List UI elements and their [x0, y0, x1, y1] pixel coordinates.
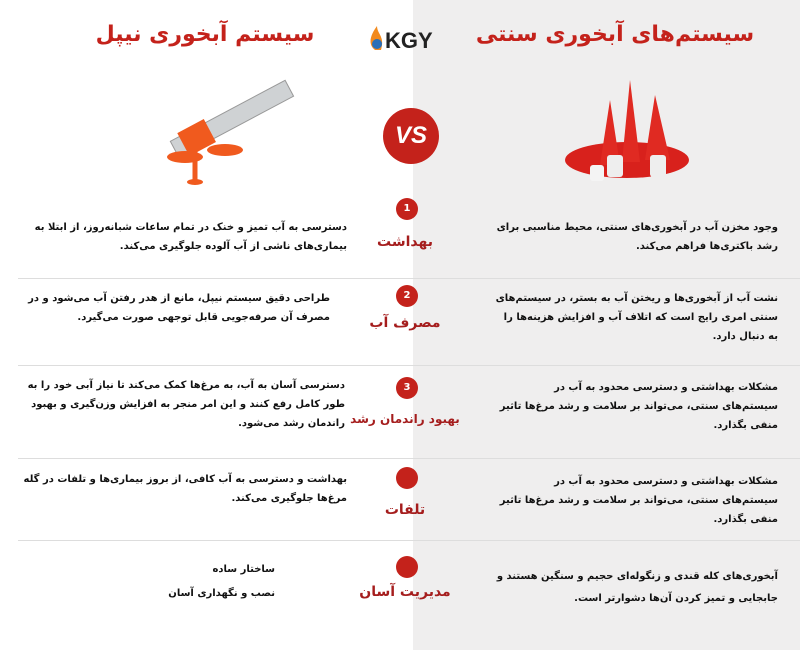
icon: VS: VS: [395, 122, 427, 149]
text: دسترسی آسان به آب، به مرغ‌ها کمک می‌کند تا نیاز آبی خود را به طور کامل رفع کنند و این امر منجر به افزایش وزن‌گیری و بهبود راندمان رشد می‌شود.: [28, 380, 345, 429]
title: traditional: سیستم‌های آبخوری سنتی: [476, 22, 754, 47]
text: بهداشت و دسترسی به آب کافی، از بروز بیماری‌ها و تلفات در گله مرغ‌ها جلوگیری می‌کند.: [24, 474, 347, 504]
image: nipple pipe: [167, 80, 294, 185]
text: آبخوری‌های کله قندی و زنگوله‌ای حجیم و سنگین هستند و جابجایی و تمیز کردن آن‌ها دشوارتر است.: [497, 571, 778, 604]
image: traditional drinkers: [565, 80, 689, 178]
icon: VS: [383, 108, 439, 164]
row 5: [168, 556, 778, 604]
text: 1: [404, 203, 410, 214]
text: بهداشت: [377, 234, 433, 250]
title: nipple: سیستم آبخوری نیپل: [96, 22, 314, 47]
text: ساختار ساده: [212, 564, 275, 575]
text: وجود مخزن آب در آبخوری‌های سنتی، محیط مناسبی برای رشد باکتری‌ها فراهم می‌کند.: [497, 222, 778, 252]
text: مدیریت آسان: [359, 584, 451, 600]
text: مشکلات بهداشتی و دسترسی محدود به آب در سیستم‌های سنتی، می‌تواند بر سلامت و رشد مرغ‌ها تاثیر منفی بگذارد.: [500, 382, 778, 431]
text: تلفات: [385, 502, 425, 518]
text: طراحی دقیق سیستم نیپل، مانع از هدر رفتن آب می‌شود و در مصرف آن صرفه‌جویی قابل توجهی صورت می‌گیرد.: [28, 293, 330, 323]
row 2: [28, 285, 778, 342]
text: بهبود راندمان رشد: [350, 412, 460, 426]
text: 3: [404, 382, 410, 393]
row 1: [35, 198, 778, 252]
text: مصرف آب: [369, 315, 441, 331]
row 4: [24, 467, 778, 525]
text: 2: [404, 290, 410, 301]
text: مشکلات بهداشتی و دسترسی محدود به آب در سیستم‌های سنتی، می‌تواند بر سلامت و رشد مرغ‌ها تاثیر منفی بگذارد.: [500, 476, 778, 525]
text: نشت آب از آبخوری‌ها و ریختن آب به بستر، در سیستم‌های سنتی امری رایج است که اتلاف آب و افزایش هزینه‌ها را به دنبال دارد.: [496, 293, 778, 342]
text: نصب و نگهداری آسان: [168, 588, 275, 599]
row 3: [28, 377, 778, 431]
text: دسترسی به آب تمیز و خنک در تمام ساعات شبانه‌روز، از ابتلا به بیماری‌های ناشی از آب آلوده جلوگیری می‌کند.: [35, 222, 347, 252]
